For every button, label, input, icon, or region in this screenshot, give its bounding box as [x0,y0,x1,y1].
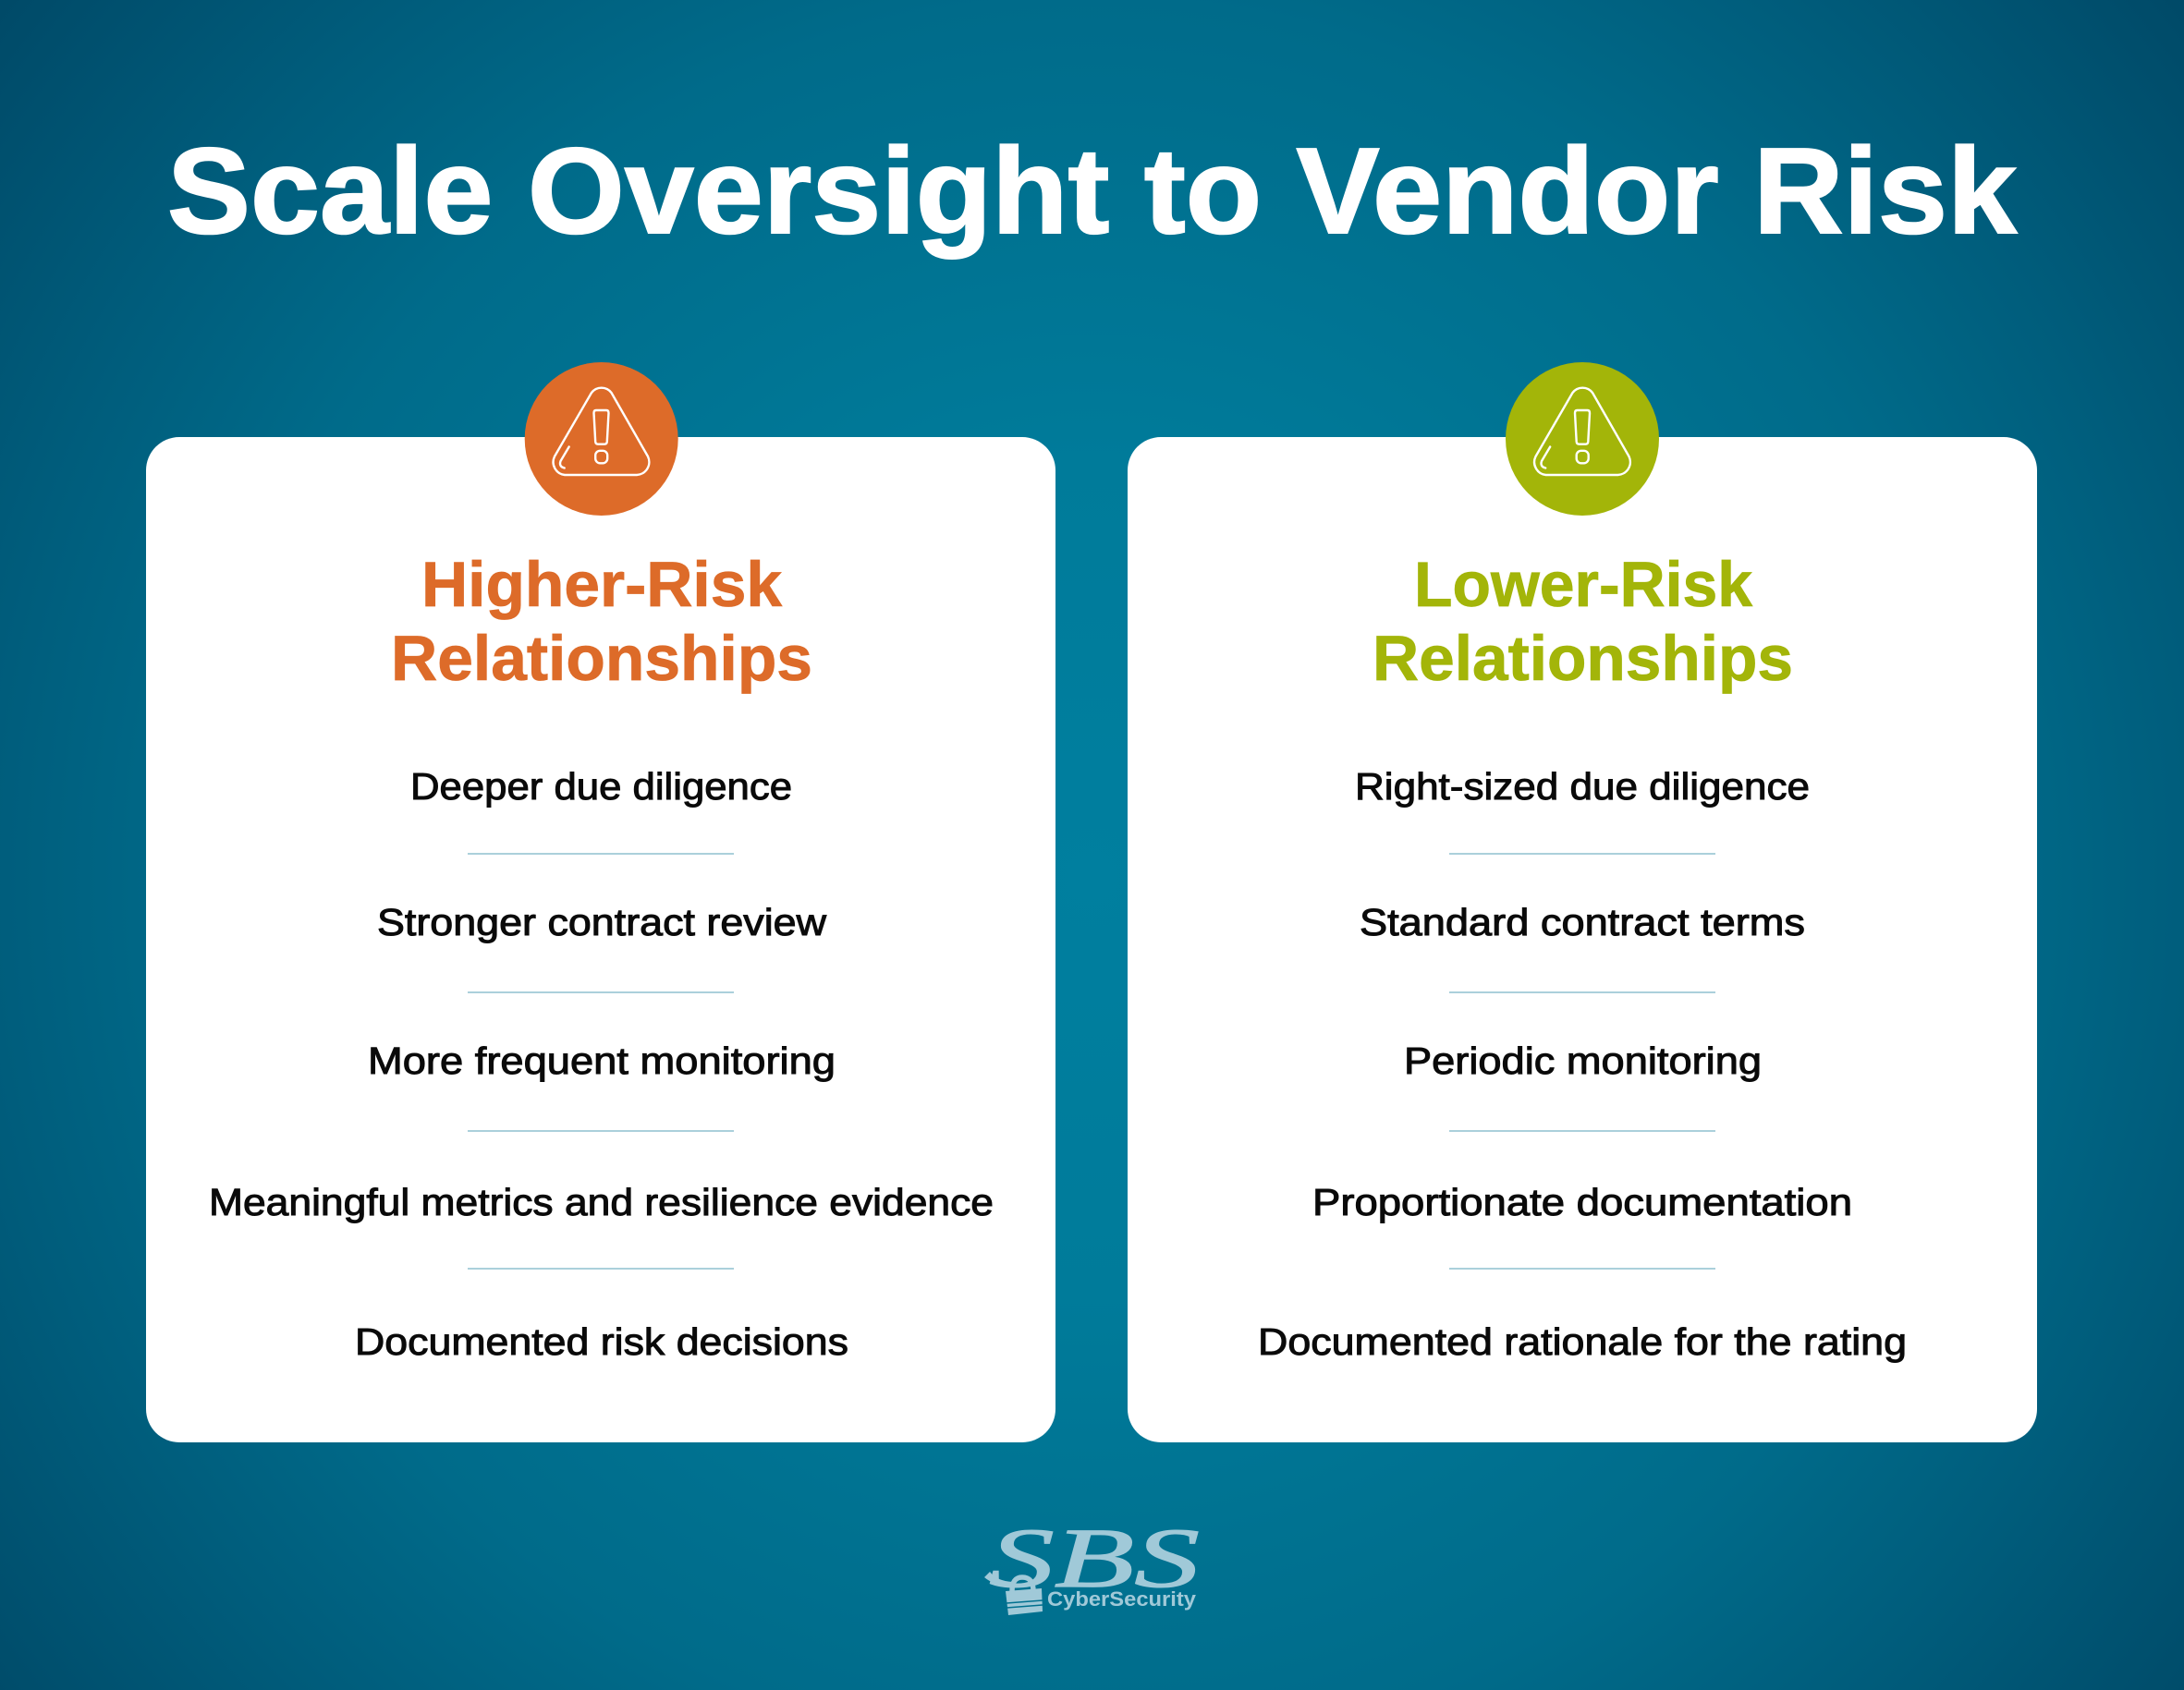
icon: padlock [1006,1577,1043,1615]
icon: green warning triangle [1506,362,1659,516]
heading: Higher-Risk Relationships [391,549,812,694]
heading: Lower-Risk Relationships: Lower-Risk [1414,549,1753,620]
title: Scale Oversight to Vendor Risk [167,123,2018,259]
list: higher-risk practices: Documented risk decisions [355,1320,848,1363]
list: lower-risk practices: Proportionate documentation [1312,1181,1852,1223]
logo: SBS CyberSecurity [984,1511,1200,1615]
logo swoosh [984,1572,1013,1586]
panel: lower-risk relationships [1128,362,2037,1442]
list: lower-risk practices: Standard contract terms [1360,901,1805,943]
list: lower-risk practices: Periodic monitoring [1404,1040,1762,1082]
heading: Higher-Risk Relationships: Relationships [391,623,812,694]
list: higher-risk practices: Meaningful metrics and resilience evidence [209,1181,994,1223]
list: lower-risk practices [1258,765,1907,1363]
list: lower-risk practices: Documented rationale for the rating [1258,1320,1907,1363]
icon: orange warning triangle [525,362,678,516]
heading: Lower-Risk Relationships [1373,549,1793,694]
list: higher-risk practices [209,765,994,1363]
card background [146,437,1055,1442]
card background [1128,437,2037,1442]
heading: Lower-Risk Relationships: Relationships [1373,623,1793,694]
list: higher-risk practices: More frequent monitoring [368,1040,836,1082]
list: higher-risk practices: Deeper due diligence [410,765,792,808]
logo tagline: CyberSecurity [1047,1587,1197,1611]
heading: Higher-Risk Relationships: Higher-Risk [421,549,783,620]
panel: higher-risk relationships [146,362,1055,1442]
logo wordmark: SBS [989,1511,1200,1605]
list: higher-risk practices: Stronger contract review [377,901,826,943]
list: lower-risk practices: Right-sized due diligence [1355,765,1810,808]
